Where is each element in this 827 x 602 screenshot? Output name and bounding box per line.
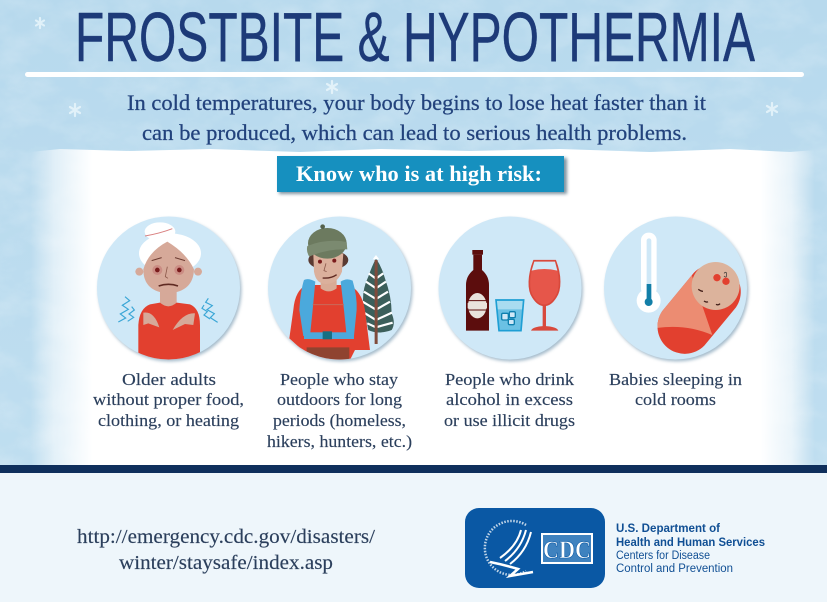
text: people who drink bbox=[444, 370, 575, 430]
pine tree bbox=[363, 255, 394, 344]
text: people who drink: or use illicit drugs bbox=[444, 411, 575, 430]
text: babies bbox=[609, 370, 742, 409]
intro text: In cold temperatures, your body begins to lose heat faster than it bbox=[127, 90, 706, 115]
text: older adults: Older adults bbox=[122, 370, 216, 389]
text: people outdoors: outdoors for long bbox=[277, 390, 402, 409]
snowflakes bbox=[36, 18, 777, 116]
text: babies: Babies sleeping in bbox=[609, 370, 742, 389]
CDC mark: CDC bbox=[543, 537, 591, 564]
heading banner: know who is at high risk bbox=[277, 156, 567, 194]
text: people who drink: alcohol in excess bbox=[446, 390, 573, 409]
shiver lines bbox=[118, 297, 218, 322]
tumbler with ice bbox=[496, 300, 524, 331]
text: older adults: without proper food, bbox=[93, 390, 244, 409]
text: people outdoors: periods (homeless, bbox=[273, 411, 406, 430]
thermometer bbox=[637, 233, 661, 313]
jacket bbox=[289, 285, 370, 360]
agency name: Centers for Disease bbox=[616, 550, 710, 562]
intro text bbox=[127, 90, 706, 145]
heading banner: know who is at high risk: Know who is at high risk: bbox=[296, 161, 542, 186]
agency name: Control and Prevention bbox=[616, 563, 733, 575]
wine glass bbox=[529, 261, 560, 331]
text: older adults bbox=[93, 370, 244, 430]
logo: HHS and CDC badge bbox=[465, 508, 605, 588]
swaddled baby bbox=[655, 262, 741, 354]
icon: hiker with pine tree bbox=[268, 216, 412, 362]
HHS eagle emblem bbox=[485, 521, 533, 576]
footer background bbox=[0, 473, 827, 602]
agency name: Health and Human Services bbox=[616, 537, 765, 549]
intro text: can be produced, which can lead to serious health problems. bbox=[142, 120, 687, 145]
icon: swaddled baby and thermometer bbox=[604, 216, 748, 362]
text: people outdoors bbox=[267, 370, 412, 451]
text: babies: cold rooms bbox=[635, 390, 716, 409]
background: icy blue texture bbox=[0, 0, 827, 470]
panel: white risk panel bbox=[30, 149, 815, 466]
text: people outdoors: People who stay bbox=[280, 370, 399, 389]
agency name bbox=[616, 523, 765, 575]
footer url bbox=[77, 526, 375, 574]
text: people who drink: People who drink bbox=[445, 370, 575, 389]
text: people outdoors: hikers, hunters, etc.) bbox=[267, 432, 412, 451]
agency name: U.S. Department of bbox=[616, 523, 720, 535]
footer url: http://emergency.cdc.gov/disasters/ bbox=[77, 526, 375, 548]
icon: alcohol bottle and glasses bbox=[438, 216, 583, 362]
icon: older adult bbox=[97, 216, 242, 363]
footer url: winter/staysafe/index.asp bbox=[119, 552, 333, 574]
footer divider band bbox=[0, 465, 827, 473]
bottle bbox=[466, 250, 489, 331]
title divider line bbox=[25, 72, 804, 77]
text: older adults: clothing, or heating bbox=[98, 411, 239, 430]
